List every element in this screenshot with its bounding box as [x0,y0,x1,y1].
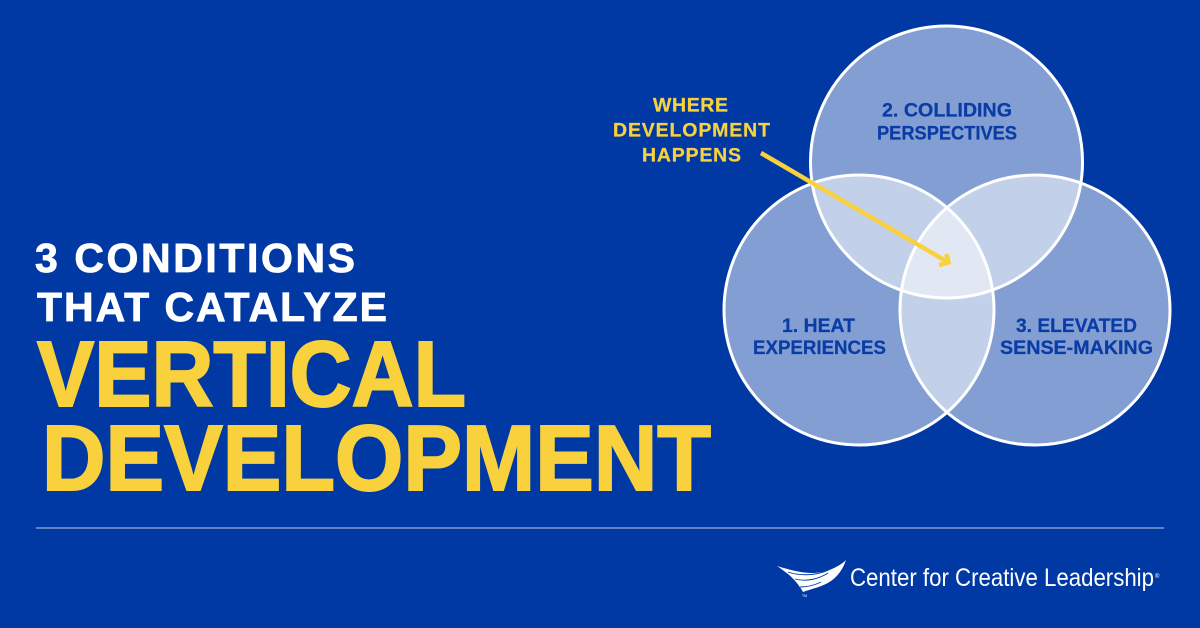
arrow [761,153,948,265]
title line: 3 conditions: 3 CONDITIONS [35,235,355,281]
circle outlines [724,26,1170,445]
label: elevated sense-making [1000,316,1153,359]
icon: wing [777,560,846,598]
label: elevated sense-making: SENSE-MAKING [1000,338,1153,359]
logo [777,560,1160,598]
divider [36,528,1164,529]
label: colliding perspectives: 2. COLLIDING [882,100,1012,122]
title line: that catalyze: THAT CATALYZE [37,284,387,330]
label: elevated sense-making: 3. ELEVATED [1016,316,1137,337]
label: colliding perspectives [877,100,1017,144]
registered mark: ® [1155,573,1160,580]
venn diagram [724,26,1170,445]
title line: vertical: VERTICAL [37,322,466,426]
callout: where development happens: WHERE [653,94,728,116]
title [35,235,711,510]
label: heat experiences: EXPERIENCES [753,338,886,359]
circle fills [724,26,1170,445]
callout: where development happens [613,94,770,166]
label: heat experiences: 1. HEAT [782,316,855,337]
label: heat experiences [753,316,886,359]
label: colliding perspectives: PERSPECTIVES [877,124,1017,144]
icon: wing: TM [802,594,807,598]
callout: where development happens: HAPPENS [642,144,741,166]
callout: where development happens: DEVELOPMENT [613,120,770,142]
title line: development: DEVELOPMENT [42,406,711,510]
logo wordmark: Center for Creative Leadership [850,564,1154,592]
